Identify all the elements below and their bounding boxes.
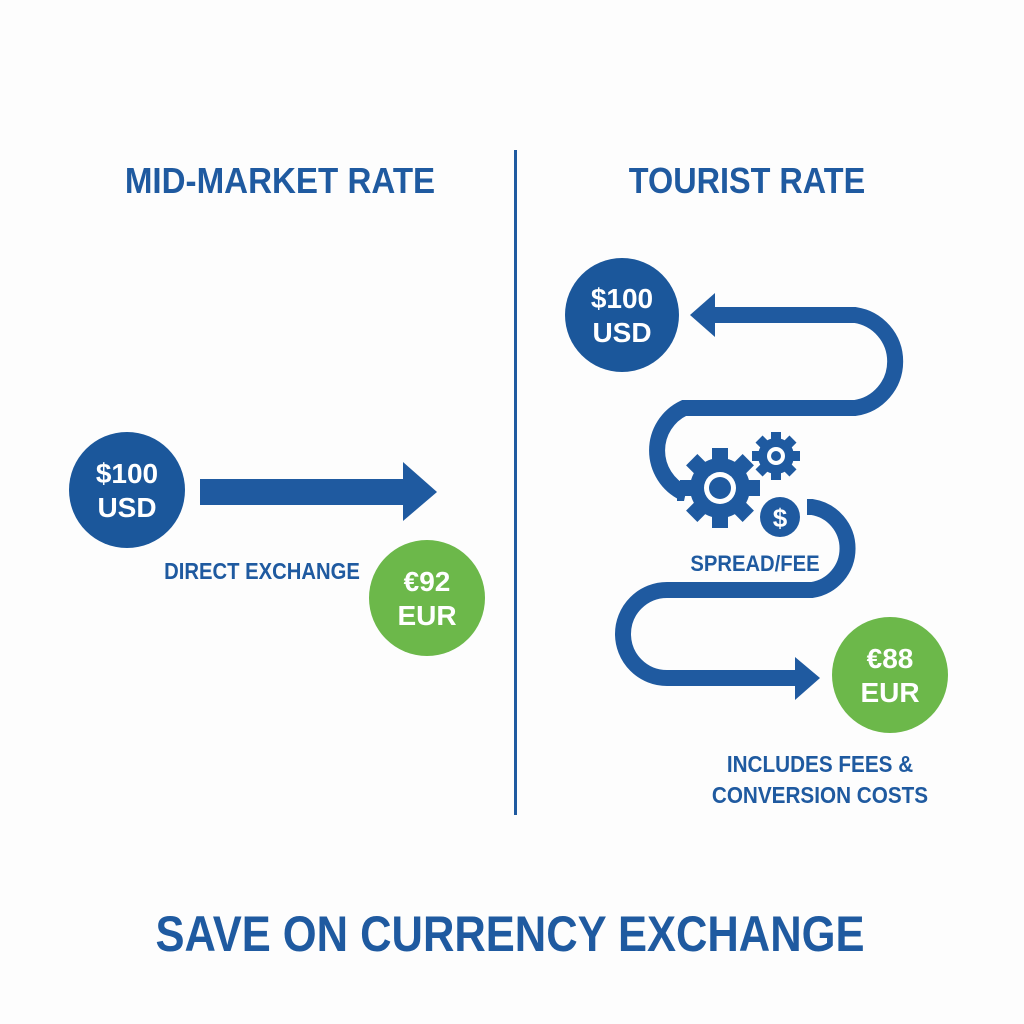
left: eur circle: EUR <box>397 600 457 631</box>
icon: big gear <box>680 448 760 528</box>
note: includes fees: CONVERSION COSTS <box>712 782 928 808</box>
right: eur circle <box>832 617 948 733</box>
icon: small gear <box>752 432 800 480</box>
note: includes fees: INCLUDES FEES & <box>727 751 913 777</box>
right: eur circle: EUR <box>860 677 920 708</box>
icon: dollar coin: $ <box>773 503 788 533</box>
arrowheads <box>690 293 820 700</box>
left: usd circle: USD <box>97 492 157 523</box>
heading: mid-market rate: MID-MARKET RATE <box>125 160 435 201</box>
divider <box>514 150 517 815</box>
right: usd circle <box>565 258 679 372</box>
left: eur circle <box>369 540 485 656</box>
note: includes fees <box>712 751 928 808</box>
label: spread/fee: SPREAD/FEE <box>690 551 820 576</box>
right: usd circle: USD <box>592 317 652 348</box>
right: usd circle: $100 <box>591 283 653 314</box>
label: direct exchange: DIRECT EXCHANGE <box>164 558 360 584</box>
footer title: SAVE ON CURRENCY EXCHANGE <box>155 906 864 962</box>
left: usd circle <box>69 432 185 548</box>
heading: tourist rate: TOURIST RATE <box>629 160 865 201</box>
left: direct arrow <box>200 462 437 521</box>
right: winding path <box>623 315 895 678</box>
icon: dollar coin <box>760 497 800 537</box>
left: usd circle: $100 <box>96 458 158 489</box>
right: eur circle: €88 <box>867 643 913 674</box>
left: eur circle: €92 <box>404 566 450 597</box>
